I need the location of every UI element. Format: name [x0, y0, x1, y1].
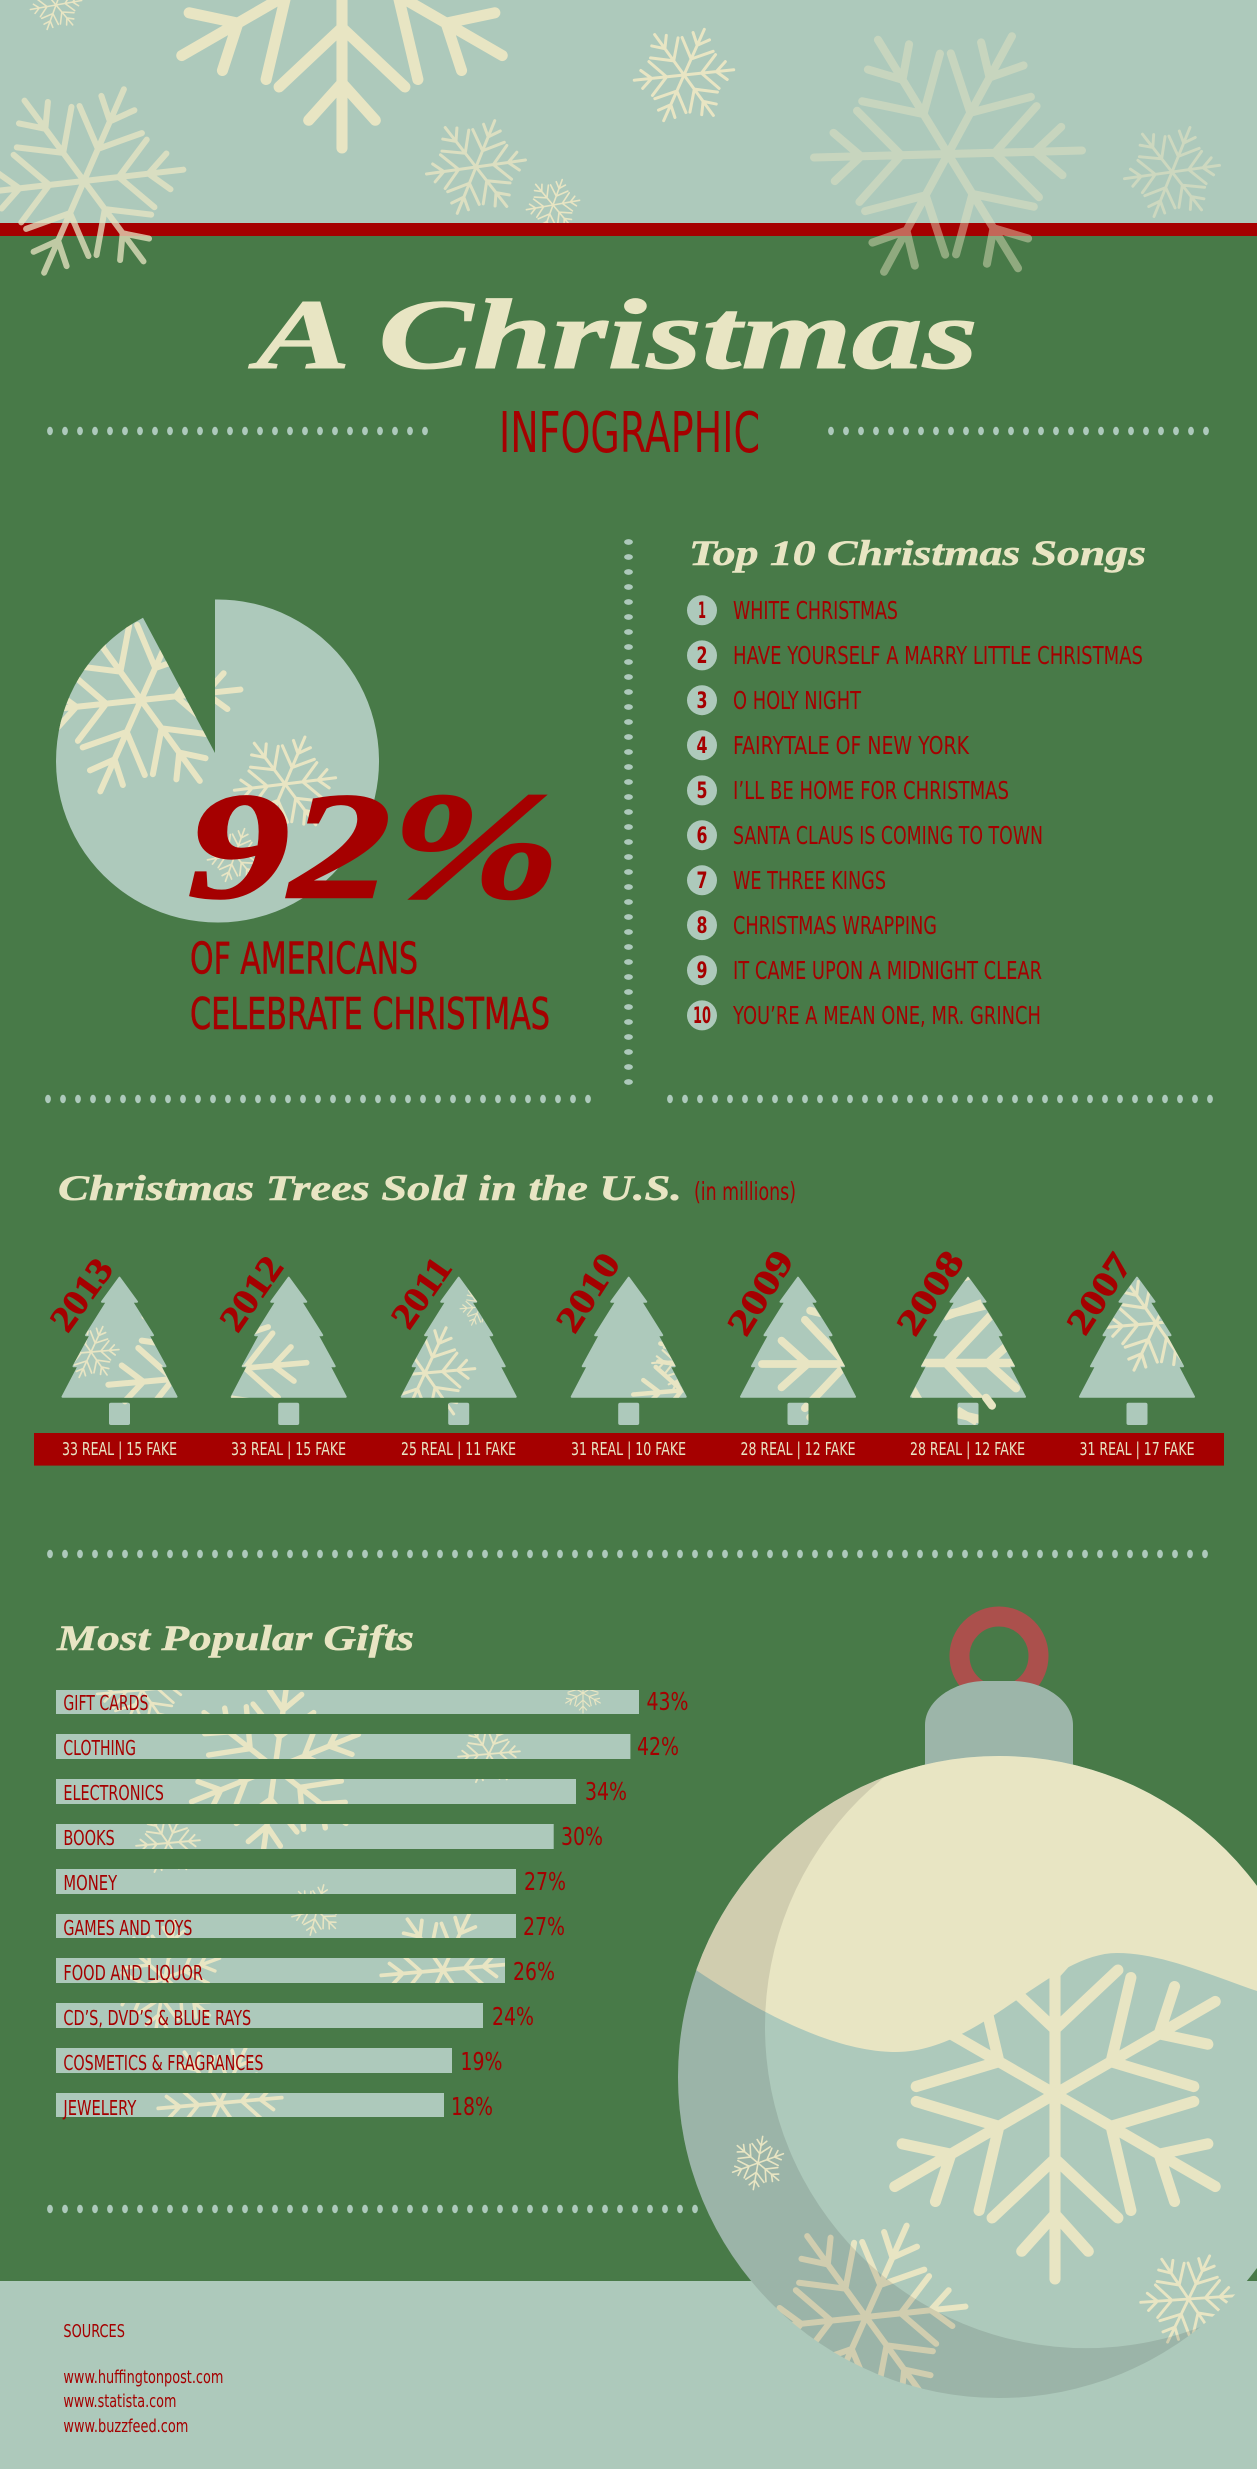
tree sales band: 25 REAL | 11 FAKE	[401, 1439, 516, 1460]
tree sales band	[34, 1433, 1224, 1466]
dotted divider under gifts	[47, 2204, 699, 2214]
year label 2007: 2007	[1058, 1246, 1140, 1341]
dotted divider right of subtitle	[828, 426, 1210, 436]
song 6	[687, 820, 1043, 850]
bar: food and liquor: FOOD AND LIQUOR	[63, 1961, 203, 1985]
bar: electronics: 34%	[585, 1777, 627, 1806]
bar: jewelery: 18%	[451, 2092, 493, 2121]
bar: gift cards	[63, 1687, 688, 1716]
icon: big faded snowflake right	[762, 0, 1134, 338]
subtitle: INFOGRAPHIC	[499, 401, 760, 466]
gifts heading: Most Popular Gifts	[56, 1618, 414, 1658]
icon: snowflake centre	[409, 101, 543, 233]
song 2	[687, 640, 1143, 670]
vertical dotted divider	[624, 539, 634, 1088]
bar: cosmetics	[63, 2047, 503, 2076]
song 8	[687, 910, 937, 940]
caption line 2: CELEBRATE CHRISTMAS	[190, 989, 550, 1040]
song 1: 1	[698, 599, 706, 624]
song 6: SANTA CLAUS IS COMING TO TOWN	[733, 821, 1043, 850]
song 8: CHRISTMAS WRAPPING	[733, 911, 937, 940]
header red ribbon	[0, 223, 1257, 236]
tree 2010	[570, 1276, 687, 1425]
song 1: WHITE CHRISTMAS	[733, 596, 898, 625]
song 6: 6	[696, 824, 708, 849]
bar: cosmetics: COSMETICS & FRAGRANCES	[63, 2051, 263, 2075]
dotted divider left of subtitle	[47, 426, 429, 436]
trees heading: Christmas Trees Sold in the U.S.	[58, 1168, 682, 1208]
song 4: 4	[696, 734, 708, 759]
songs heading: Top 10 Christmas Songs	[689, 533, 1146, 573]
song 9	[687, 955, 1042, 985]
bar: electronics	[63, 1777, 627, 1806]
footer background	[0, 2281, 1257, 2469]
icon: large snowflake top centre	[150, 0, 534, 148]
song 4: FAIRYTALE OF NEW YORK	[733, 731, 969, 760]
trees unit note: (in millions)	[694, 1177, 796, 1206]
snowflakes showing through bars	[96, 1690, 601, 2117]
bar: money	[63, 1867, 566, 1896]
bar: clothing: CLOTHING	[63, 1736, 136, 1760]
song 5: 5	[696, 779, 708, 804]
sources	[63, 2321, 223, 2437]
ornament cap	[925, 1681, 1073, 1770]
tree sales band: 28 REAL | 12 FAKE	[740, 1439, 856, 1460]
tree sales band: 31 REAL | 17 FAKE	[1080, 1439, 1194, 1460]
bar chart bars	[56, 1690, 639, 2117]
tree 2012	[230, 1276, 347, 1425]
song 3	[687, 685, 862, 715]
bar: cds and dvds: 24%	[492, 2002, 534, 2031]
source 3: www.buzzfeed.com	[63, 2416, 188, 2437]
bar: games and toys: GAMES AND TOYS	[63, 1916, 192, 1940]
bar: food and liquor: 26%	[513, 1957, 555, 1986]
panel: most popular gifts	[56, 1624, 688, 2120]
icon: snowflake centre right	[616, 8, 752, 142]
song 7: 7	[696, 869, 708, 894]
song 5	[687, 775, 1009, 805]
bar: jewelery	[62, 2092, 493, 2121]
sources heading: SOURCES	[63, 2321, 125, 2342]
pie chart	[56, 599, 379, 922]
song 10: YOU’RE A MEAN ONE, MR. GRINCH	[732, 1001, 1041, 1030]
tree 2011	[400, 1276, 517, 1425]
bar: gift cards: 43%	[646, 1687, 688, 1716]
song 5: I’LL BE HOME FOR CHRISTMAS	[733, 776, 1009, 805]
bar: books	[63, 1822, 603, 1851]
year label 2013: 2013	[42, 1250, 121, 1339]
bar: books: 30%	[561, 1822, 603, 1851]
panel: 92 percent pie	[56, 600, 552, 1030]
tree sales band: 28 REAL | 12 FAKE	[910, 1439, 1025, 1460]
year label 2011: 2011	[383, 1250, 460, 1336]
title: A Christmas	[247, 279, 978, 390]
caption line 1: OF AMERICANS	[190, 934, 418, 984]
year label 2008: 2008	[888, 1243, 972, 1342]
dotted divider under pie	[45, 1094, 593, 1104]
bar: money: MONEY	[63, 1871, 118, 1895]
bar: money: 27%	[524, 1867, 566, 1896]
bar: books: BOOKS	[63, 1826, 115, 1850]
source 2: www.statista.com	[63, 2391, 176, 2412]
bar: cosmetics: 19%	[460, 2047, 502, 2076]
ornament body	[678, 1756, 1257, 2398]
bar: games and toys	[63, 1912, 565, 1941]
song 3: O HOLY NIGHT	[733, 686, 862, 715]
bar: games and toys: 27%	[523, 1912, 565, 1941]
big percentage: 92%	[188, 762, 560, 930]
tree 2013	[62, 1276, 178, 1425]
song 8: 8	[696, 914, 708, 939]
song 3: 3	[696, 689, 708, 714]
bar: gift cards: GIFT CARDS	[63, 1691, 148, 1715]
icon: snowflake left over ribbon	[0, 48, 219, 314]
tree 2007	[1079, 1276, 1195, 1425]
song 2: 2	[696, 644, 708, 669]
song 7: WE THREE KINGS	[733, 866, 886, 895]
song 10	[687, 1000, 1041, 1030]
icon: tiny snowflake centre	[517, 170, 589, 240]
icon: faded snowflake far right	[1108, 109, 1236, 235]
ornament ring	[960, 1616, 1038, 1696]
song 4	[687, 730, 969, 760]
tree sales band: 33 REAL | 15 FAKE	[231, 1439, 346, 1460]
bar: cds and dvds	[63, 2002, 534, 2031]
year label 2009: 2009	[719, 1243, 802, 1342]
song 9: 9	[696, 959, 708, 984]
bar: food and liquor	[63, 1957, 555, 1986]
tree 2008	[910, 1276, 1026, 1425]
dotted divider under songs	[667, 1094, 1215, 1104]
bar: electronics: ELECTRONICS	[63, 1781, 164, 1805]
tree sales band: 33 REAL | 15 FAKE	[62, 1439, 177, 1460]
bar: jewelery: JEWELERY	[62, 2096, 137, 2120]
header band	[0, 0, 1257, 338]
bar: clothing: 42%	[637, 1732, 679, 1761]
year label 2010: 2010	[548, 1245, 628, 1339]
pie snowflakes	[59, 622, 338, 882]
song 7	[687, 865, 886, 895]
song 9: IT CAME UPON A MIDNIGHT CLEAR	[733, 956, 1042, 985]
tree sales band: 31 REAL | 10 FAKE	[571, 1439, 686, 1460]
bar: clothing	[63, 1732, 679, 1761]
song 1	[687, 595, 898, 625]
ornament	[650, 1616, 1257, 2450]
year label 2012: 2012	[211, 1248, 291, 1339]
panel: christmas trees sold	[34, 1174, 1224, 1466]
panel: top 10 songs	[687, 533, 1146, 1030]
song 10: 10	[693, 1004, 711, 1029]
tree 2009	[740, 1276, 856, 1425]
bar: cds and dvds: CD’S, DVD’S & BLUE RAYS	[63, 2006, 251, 2030]
dotted divider under trees	[47, 1549, 1210, 1559]
icon: small snowflake top left	[22, 0, 90, 39]
source 1: www.huffingtonpost.com	[63, 2367, 223, 2388]
icon: small ornament snowflake	[726, 2132, 790, 2194]
